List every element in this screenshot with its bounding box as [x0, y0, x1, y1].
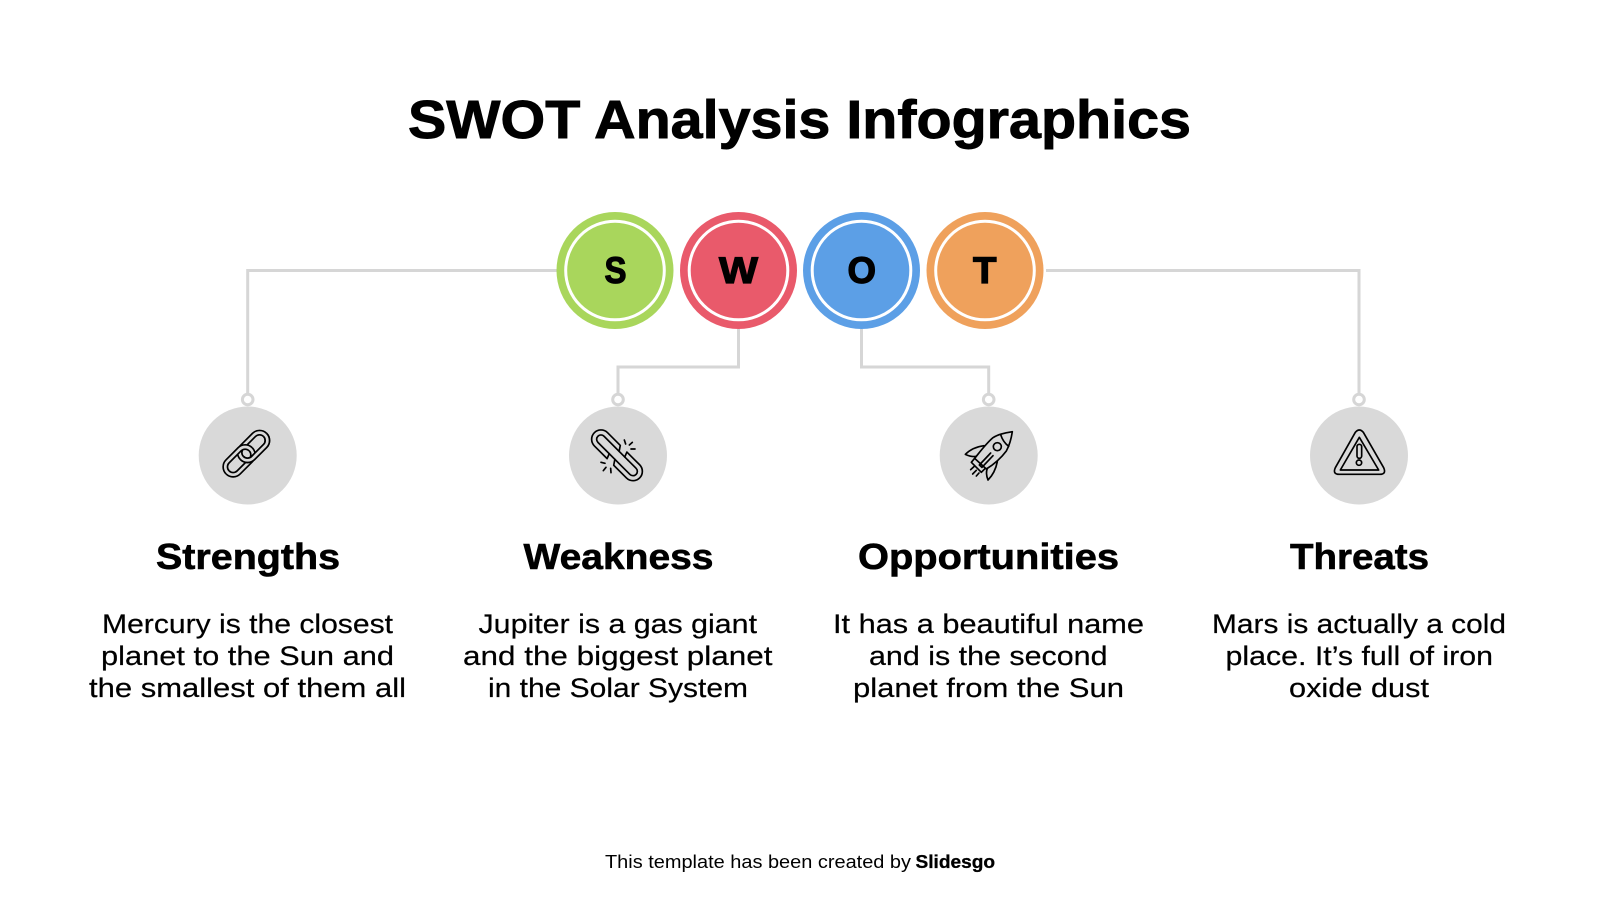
- badge: S: [556, 212, 674, 329]
- connector: S to Strengths: [242, 270, 557, 405]
- connector: O to Opportunities: [862, 329, 994, 405]
- footer credit: Slidesgo: [916, 852, 995, 872]
- column: Opportunities: planet from the Sun: [853, 673, 1124, 703]
- badge: T: T: [973, 250, 997, 291]
- column: Opportunities: It has a beautiful name: [833, 609, 1144, 639]
- column: Strengths: Strengths: [156, 536, 340, 577]
- column: Opportunities: [833, 536, 1144, 703]
- connector: T to Threats: [1046, 270, 1364, 405]
- icon: rocket: [940, 406, 1038, 504]
- column: Strengths: Mercury is the closest: [102, 609, 394, 639]
- column: Threats: Mars is actually a cold: [1212, 609, 1506, 639]
- column: Weakness: in the Solar System: [488, 673, 748, 703]
- column: Opportunities: and is the second: [869, 641, 1108, 671]
- icon: warning triangle: [1310, 406, 1408, 504]
- column: Threats: oxide dust: [1289, 673, 1430, 703]
- column: Threats: Threats: [1290, 536, 1429, 577]
- badge: T: [926, 212, 1044, 329]
- badge: W: [680, 212, 797, 329]
- badge: W: W: [719, 250, 758, 291]
- footer credit: This template has been created by: [605, 852, 911, 872]
- column: Weakness: [463, 536, 773, 703]
- column: Opportunities: Opportunities: [858, 536, 1119, 577]
- column: Weakness: and the biggest planet: [463, 641, 773, 671]
- column: Weakness: Weakness: [524, 536, 714, 577]
- badge: O: [803, 212, 920, 329]
- column: Strengths: planet to the Sun and: [101, 641, 394, 671]
- badge: O: O: [848, 250, 876, 291]
- column: Weakness: Jupiter is a gas giant: [478, 609, 758, 639]
- column: Strengths: [89, 536, 406, 703]
- column: Threats: place. It’s full of iron: [1226, 641, 1493, 671]
- column: Strengths: the smallest of them all: [89, 673, 406, 703]
- column: Threats: [1212, 536, 1506, 703]
- connector: W to Weakness: [613, 329, 738, 405]
- badge: S: S: [604, 250, 626, 291]
- icon: broken chain: [569, 406, 667, 504]
- icon: chain link: [199, 406, 297, 504]
- title: SWOT Analysis Infographics: [408, 90, 1191, 150]
